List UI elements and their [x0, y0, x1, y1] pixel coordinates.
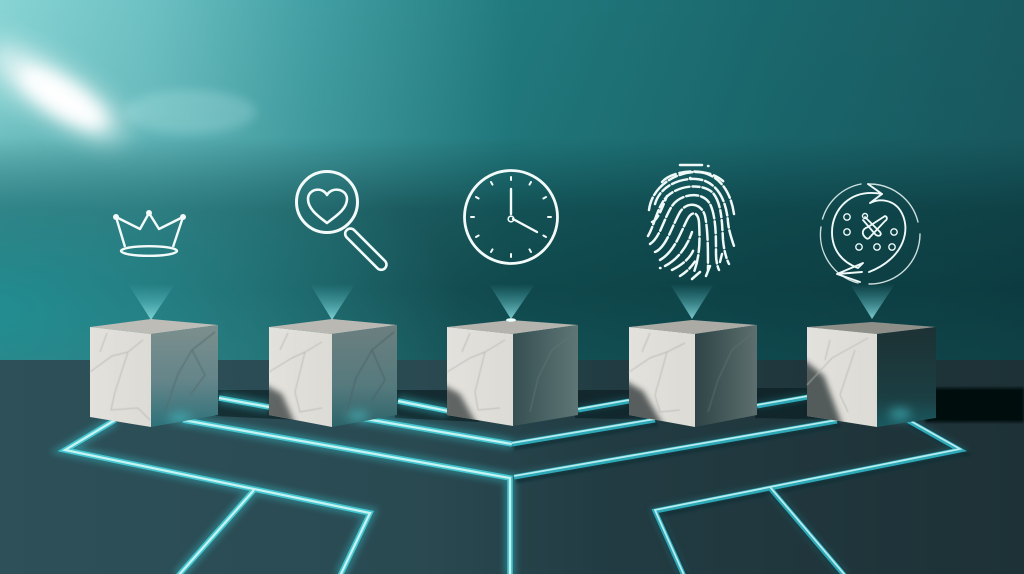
cube 3 [438, 318, 578, 430]
icon: cycle arrows with dots [820, 184, 920, 284]
cube 1 [90, 319, 218, 427]
background wall [0, 0, 1024, 362]
floor light lines: left half [65, 398, 512, 574]
cube 5 [798, 322, 936, 430]
cube 5 marble veins [807, 338, 868, 412]
cube 4 top face [629, 320, 757, 334]
cube 2 top face [269, 319, 397, 334]
icon: fingerprint [648, 165, 734, 279]
floor light lines: right half [512, 396, 962, 574]
back shadows between cubes [215, 388, 1024, 422]
cube 2 right face [332, 325, 397, 427]
cube 2 marble veins [269, 332, 394, 415]
lens flare [0, 32, 256, 152]
cube 5 left face [807, 327, 877, 427]
cube 1 left face [90, 327, 151, 427]
cube 3 shadow [447, 382, 479, 420]
cube 3 left face [447, 327, 513, 426]
cube 5 right face [877, 327, 936, 427]
cube 1 top face [90, 319, 218, 334]
cube 5 top face [807, 322, 936, 334]
projection beams [128, 284, 895, 320]
cube 1 right face [151, 325, 218, 427]
foot glows at cube corners [168, 408, 911, 423]
cube 4 left face [629, 327, 695, 427]
cube 2 shadow [269, 382, 298, 420]
cube 2 left face [269, 327, 332, 427]
cube 3 right face [513, 325, 578, 426]
cube 3 marble veins [447, 332, 575, 412]
cube 5 shadow [807, 357, 846, 422]
floor [0, 360, 1024, 574]
cube 4 marble veins [629, 332, 754, 412]
icon: magnifying glass with heart [296, 172, 389, 272]
cube 1 marble veins [90, 332, 215, 420]
cube 4 shadow [629, 378, 666, 422]
cube 4 [620, 320, 757, 430]
cube 3 light spot [506, 318, 516, 322]
icon: clock [464, 170, 558, 264]
icon: crown [114, 211, 185, 256]
cube 4 right face [695, 325, 757, 427]
cube 2 [260, 319, 397, 430]
cube 3 top face [447, 320, 578, 334]
